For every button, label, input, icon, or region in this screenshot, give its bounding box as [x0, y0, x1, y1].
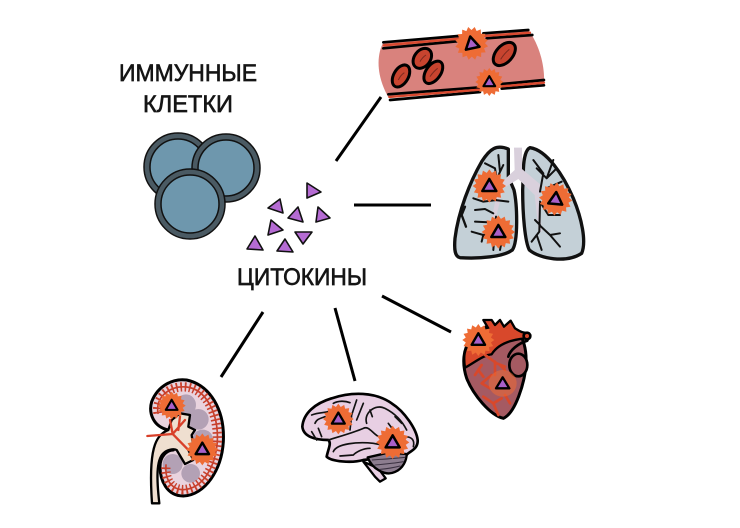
arrow lines from cytokines to organs: [221, 97, 451, 381]
renal pelvis and ureter: [151, 413, 195, 503]
label: cytokines: ЦИТОКИНЫ: [237, 264, 367, 291]
icon: brain: [302, 394, 418, 482]
heading: immune cells: ИММУННЫЕ: [119, 60, 257, 87]
heading: immune cells: КЛЕТКИ: [143, 91, 233, 118]
heading: immune cells: [119, 60, 257, 118]
cortex vessels: [158, 387, 217, 490]
icon: kidney: [147, 380, 223, 503]
icon: cytokine triangles: [247, 183, 330, 252]
icon: lungs: [455, 147, 584, 259]
red blood cells: [389, 38, 520, 90]
coronary vessels: [475, 355, 510, 415]
icon: heart: [462, 320, 530, 418]
icon: blood vessel: [379, 24, 544, 100]
pyramids: [163, 394, 213, 483]
upper chambers and aorta: [464, 320, 527, 368]
airways: [492, 148, 542, 232]
cerebellum: [368, 453, 407, 473]
sulci: [312, 400, 414, 456]
icon: immune cells cluster: [144, 133, 260, 239]
